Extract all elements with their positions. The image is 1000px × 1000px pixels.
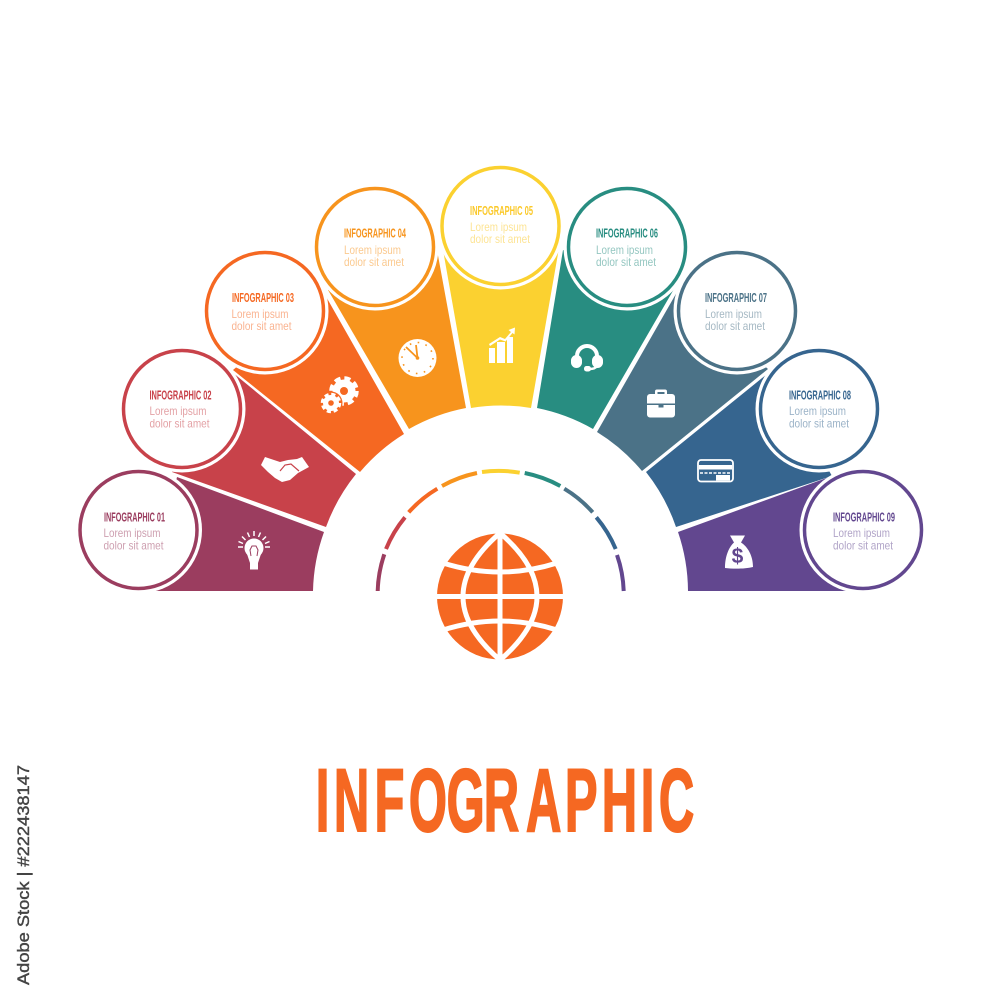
icon: globe: [435, 530, 565, 663]
text 06: Lorem ipsum: [596, 243, 653, 257]
panel: infographic 08: [646, 346, 882, 527]
text 03: [232, 290, 294, 333]
panel: infographic 06: [537, 184, 690, 429]
text 04: INFOGRAPHIC 04: [344, 226, 406, 240]
circle 03: [202, 248, 328, 374]
icon: handshake: [261, 457, 309, 482]
text 08: INFOGRAPHIC 08: [789, 388, 851, 402]
panel: infographic 04: [312, 184, 466, 429]
text 03: INFOGRAPHIC 03: [232, 290, 294, 305]
text 06: INFOGRAPHIC 06: [596, 226, 658, 240]
icon: gears: [320, 380, 356, 414]
text 07: dolor sit amet: [705, 319, 766, 333]
text 01: [104, 510, 165, 552]
icon: rising chart: [489, 328, 515, 363]
text 01: dolor sit amet: [104, 538, 164, 552]
icon: money bag: $: [732, 545, 744, 568]
panel: infographic 03: [202, 248, 404, 472]
segmented arc: [378, 471, 624, 591]
text 07: [705, 290, 767, 333]
panel: infographic 09: [678, 466, 926, 594]
text 05: [470, 203, 533, 246]
text 02: dolor sit amet: [150, 416, 210, 430]
icon: credit card: [698, 460, 733, 482]
text 05: dolor sit amet: [470, 232, 531, 246]
panel: infographic 07: [597, 248, 800, 471]
segment 06: [537, 250, 674, 429]
text 01: INFOGRAPHIC 01: [104, 510, 165, 524]
circle 05: [437, 162, 564, 290]
segment 09: [678, 476, 852, 591]
text 04: [344, 226, 406, 269]
text 04: dolor sit amet: [344, 255, 405, 269]
panel: infographic 05: [437, 162, 564, 408]
circle 08: [756, 346, 882, 472]
text 09: Lorem ipsum: [833, 526, 890, 540]
icon: briefcase: [647, 390, 675, 418]
circle 07: [674, 248, 800, 374]
text 07: INFOGRAPHIC 07: [705, 290, 767, 305]
circle 01: [75, 466, 202, 594]
text 02: INFOGRAPHIC 02: [150, 388, 212, 402]
panel: infographic 02: [118, 346, 356, 527]
text 05: Lorem ipsum: [470, 220, 527, 234]
side stock label: Adobe Stock | #222438147: [14, 765, 33, 985]
circle 09: [800, 466, 926, 594]
segment 01: [150, 477, 324, 591]
text 09: dolor sit amet: [833, 538, 894, 552]
segment 08: [646, 370, 832, 527]
text 03: dolor sit amet: [232, 319, 292, 333]
text 09: INFOGRAPHIC 09: [833, 510, 895, 524]
text 02: [150, 388, 212, 430]
icon: money bag: [725, 536, 753, 569]
text 08: [789, 388, 851, 430]
text 08: dolor sit amet: [789, 416, 850, 430]
text 07: Lorem ipsum: [705, 307, 762, 321]
text 05: INFOGRAPHIC 05: [470, 203, 533, 218]
text 06: [596, 226, 658, 269]
text 06: dolor sit amet: [596, 255, 657, 269]
segment 03: [233, 293, 404, 472]
text 03: Lorem ipsum: [232, 307, 289, 321]
segment 02: [172, 372, 356, 527]
panel: infographic 01: [75, 466, 324, 594]
icon: clock: [398, 339, 436, 377]
text 04: Lorem ipsum: [344, 243, 401, 257]
title: INFOGRAPHIC: [316, 752, 694, 851]
segment 05: [443, 248, 559, 408]
circle 06: [564, 184, 690, 310]
icon: headset: [571, 346, 603, 372]
circle 04: [312, 184, 438, 310]
text 02: Lorem ipsum: [150, 404, 207, 418]
icon: light bulb: [238, 531, 270, 570]
text 09: [833, 510, 895, 552]
segment 07: [597, 292, 768, 471]
text 01: Lorem ipsum: [104, 526, 161, 540]
segment 04: [328, 250, 466, 429]
text 08: Lorem ipsum: [789, 404, 846, 418]
circle 02: [118, 346, 246, 472]
